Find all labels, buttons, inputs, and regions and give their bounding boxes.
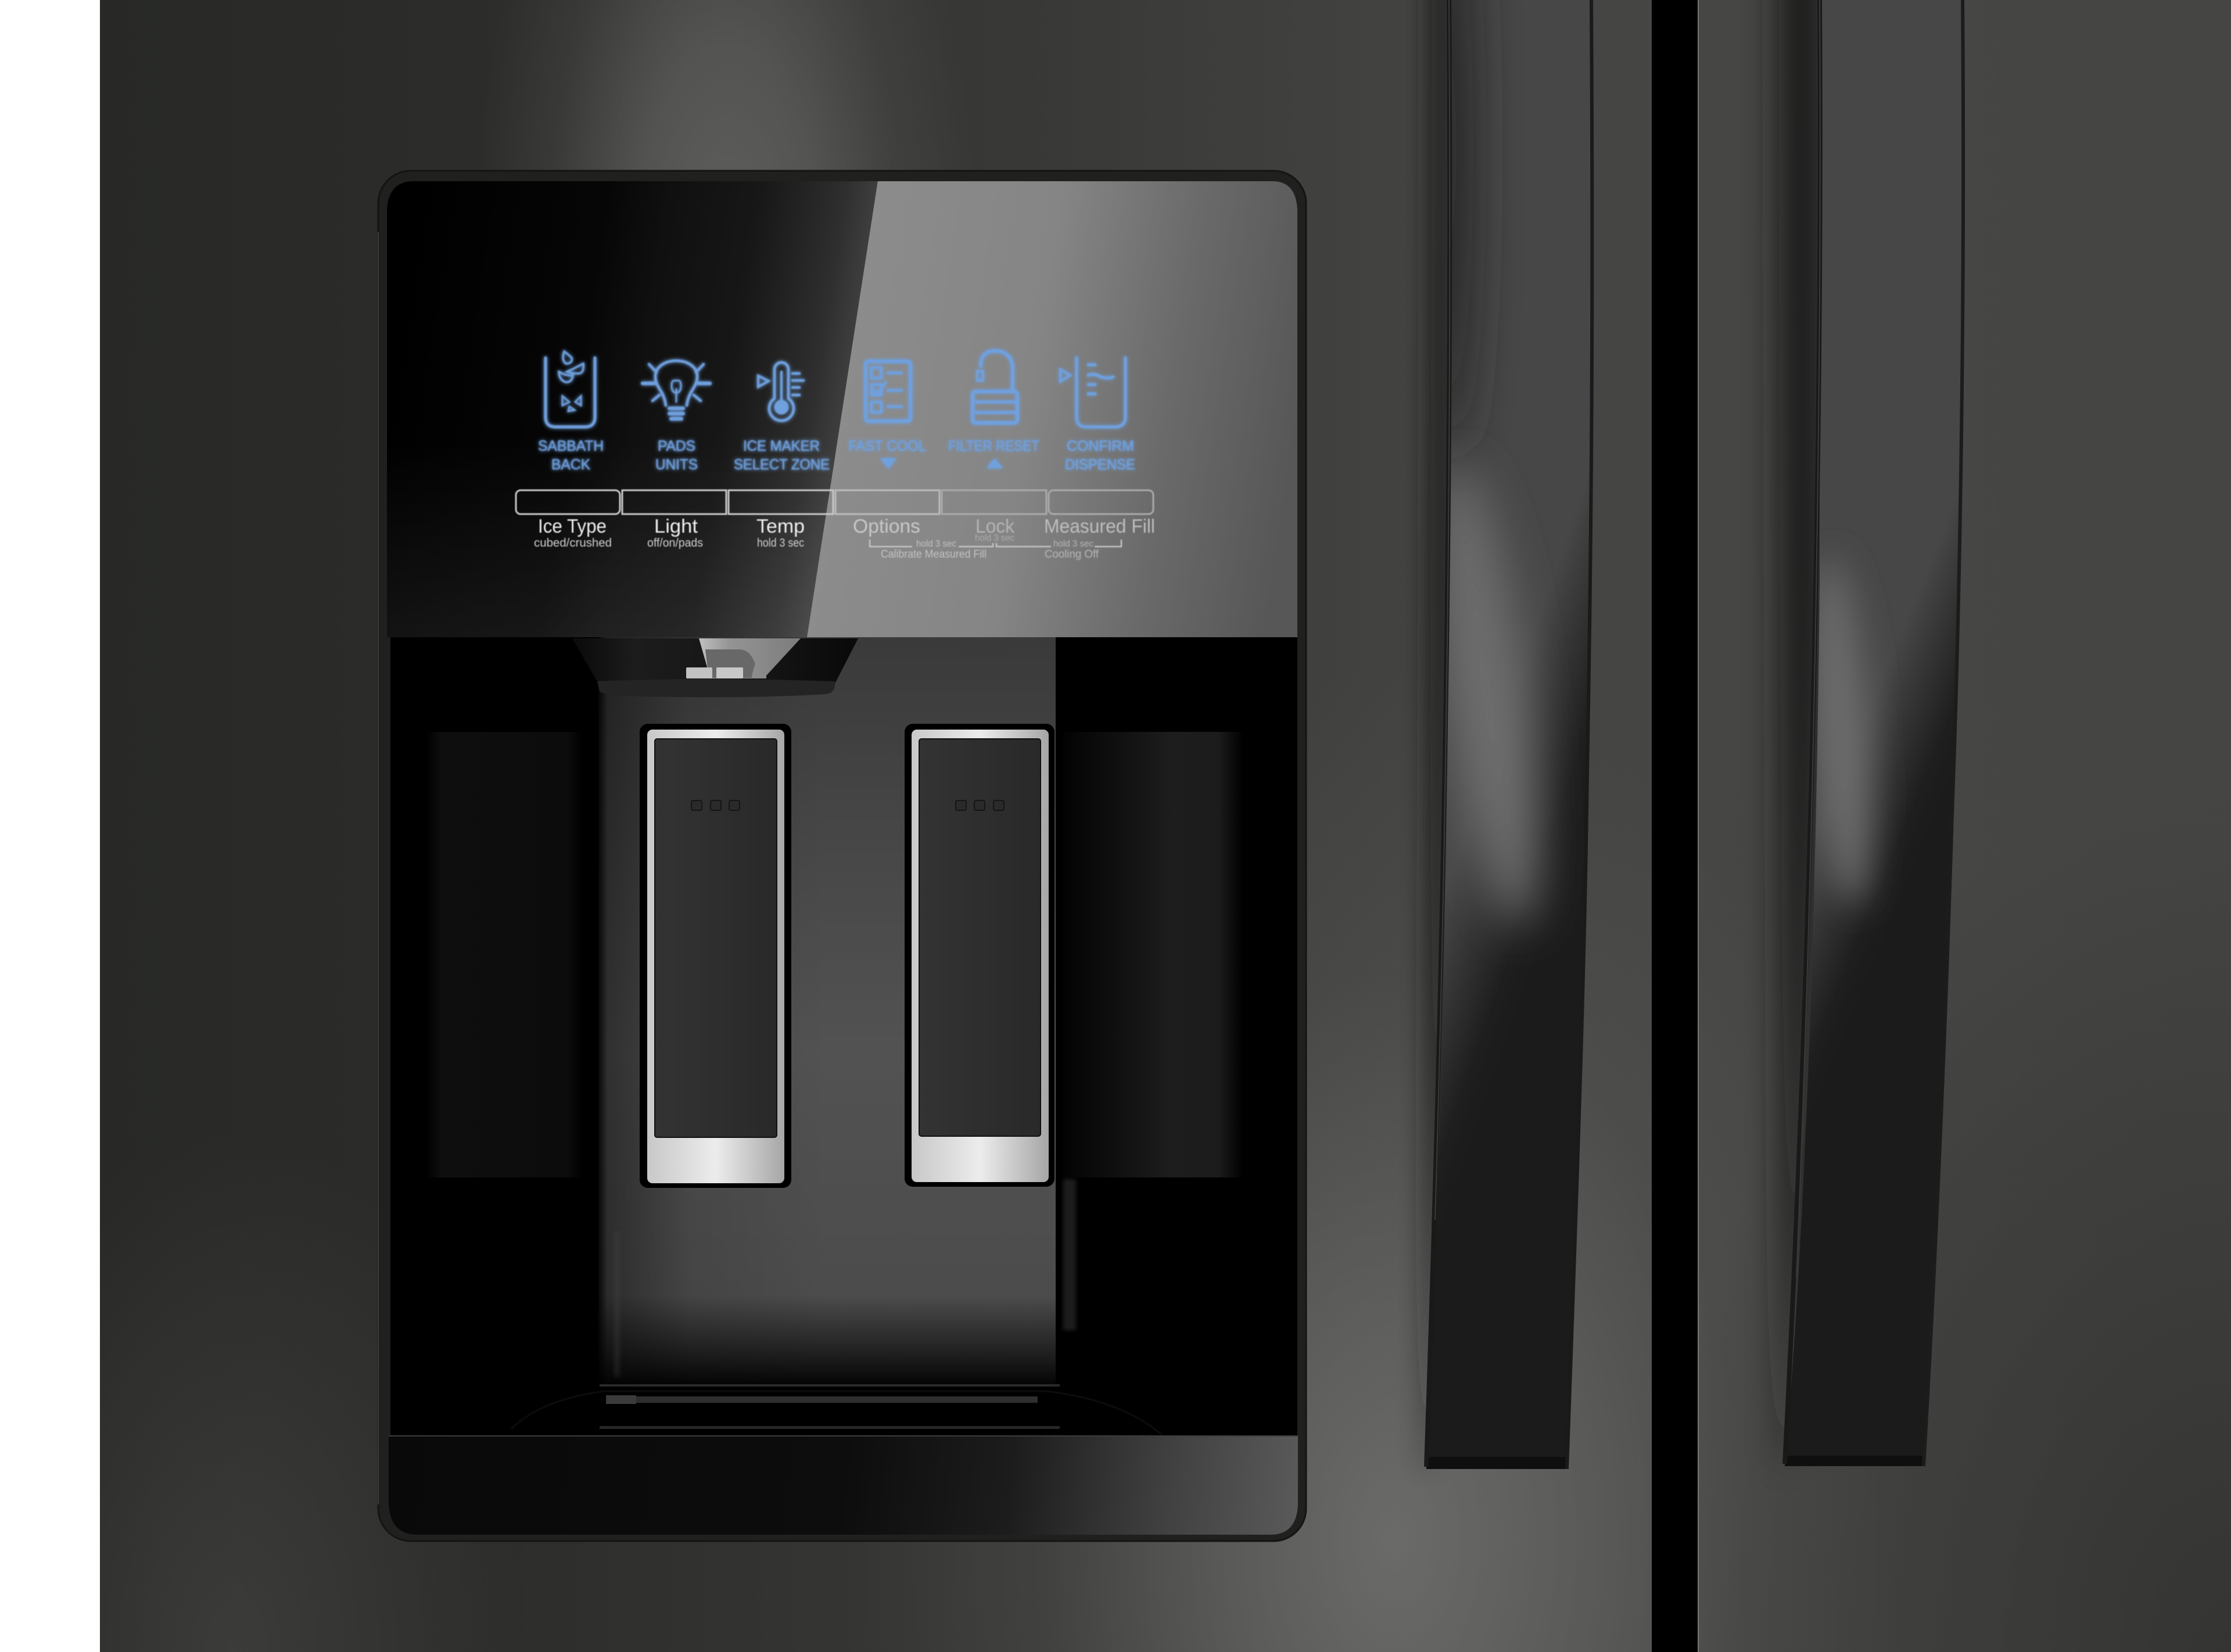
wall edge highlights xyxy=(615,1179,1076,1377)
button captions: Options xyxy=(853,515,920,537)
door handle left xyxy=(1417,0,1604,1475)
head lip xyxy=(597,679,835,697)
button labels: blue: DISPENSE xyxy=(1065,457,1135,473)
side reflections xyxy=(426,732,1243,1177)
cavity light nub xyxy=(962,638,1007,655)
icon: measuring cup xyxy=(1060,358,1125,427)
panel: glass control panel xyxy=(387,181,1298,637)
drip tray lines xyxy=(511,1384,1162,1435)
button captions: cubed/crushed xyxy=(534,537,612,550)
button labels: blue: CONFIRM xyxy=(1067,438,1134,454)
funnel xyxy=(699,638,801,678)
button captions: hold 3 sec xyxy=(975,533,1014,543)
button labels: blue: FILTER RESET xyxy=(948,438,1039,454)
glass reflection xyxy=(807,181,1297,637)
icon: padlock xyxy=(973,351,1017,423)
button labels: blue: SELECT ZONE xyxy=(734,457,830,473)
button captions: Cooling Off xyxy=(1045,548,1099,561)
button labels: blue: ICE MAKER xyxy=(743,438,820,454)
button labels: blue: SABBATH xyxy=(538,438,604,454)
panel: bottom lip xyxy=(389,1436,1298,1535)
icon: light bulb xyxy=(643,361,710,419)
door handle right xyxy=(1778,0,1970,1475)
indicator dots xyxy=(956,800,1004,810)
button captions: hold 3 sec xyxy=(916,539,956,549)
button captions: off/on/pads xyxy=(647,537,703,550)
panel: dispenser cavity xyxy=(390,637,1297,1436)
left dispenser paddle xyxy=(640,724,791,1188)
icon: thermometer xyxy=(758,362,804,421)
back wall xyxy=(598,637,1056,1385)
button captions: Temp xyxy=(756,515,805,537)
icon: checklist xyxy=(866,361,910,421)
button captions: hold 3 sec xyxy=(757,537,804,550)
indicator dots xyxy=(691,800,740,810)
button captions: Ice Type xyxy=(538,515,607,537)
button captions xyxy=(534,515,1155,561)
icon: sabbath cup with ice xyxy=(546,351,595,427)
button labels: blue: BACK xyxy=(551,457,590,473)
button labels: blue: UNITS xyxy=(655,457,698,473)
button captions: Lock xyxy=(975,515,1014,537)
button captions: Light xyxy=(654,515,698,537)
button labels: blue xyxy=(538,438,1135,473)
water and ice tabs xyxy=(686,667,743,678)
touch buttons row xyxy=(516,490,1153,514)
calibration brackets xyxy=(870,540,1121,547)
button labels: blue: PADS xyxy=(658,438,695,454)
button captions: hold 3 sec xyxy=(1053,539,1093,549)
right dispenser paddle xyxy=(905,724,1054,1187)
button captions: Calibrate Measured Fill xyxy=(881,548,987,561)
center door gap xyxy=(1652,0,1699,1652)
button captions: Measured Fill xyxy=(1044,515,1155,537)
panel: dispenser frame xyxy=(378,171,1306,1541)
button labels: blue: FAST COOL xyxy=(848,438,926,454)
dispenser head xyxy=(572,638,858,697)
handle shadows xyxy=(1425,0,1824,1469)
